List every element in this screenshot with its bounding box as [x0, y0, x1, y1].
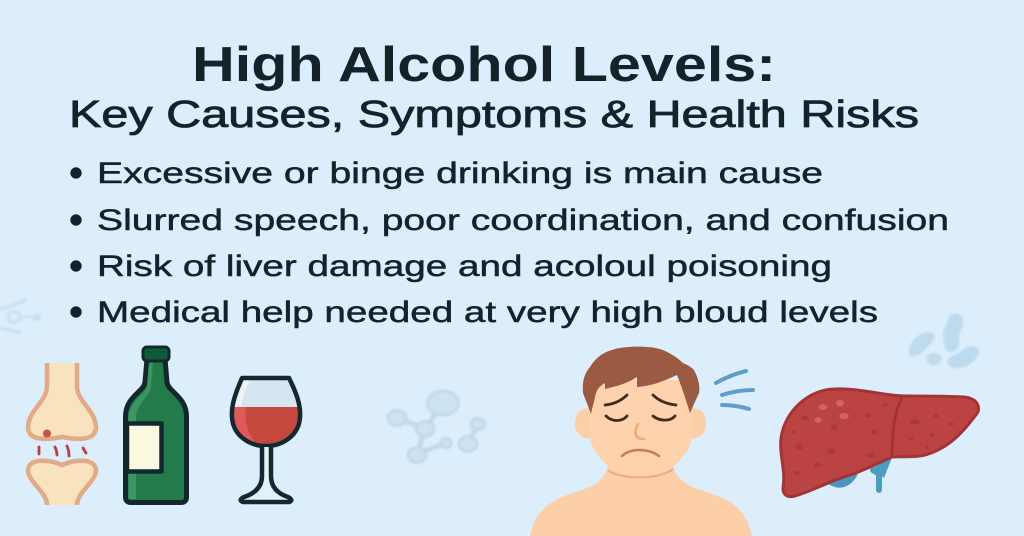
icon: faint cells right [909, 313, 979, 368]
spots [792, 403, 954, 476]
bullet 4: Medical help needed at very high bloud levels [97, 296, 878, 329]
highlights [814, 400, 849, 423]
bullet 3: Risk of liver damage and acoloul poisoning [97, 250, 832, 283]
mouth [622, 450, 659, 456]
hair [583, 347, 699, 414]
neck line [608, 469, 673, 477]
liver body [781, 389, 978, 497]
bile ducts [824, 474, 858, 488]
face [590, 380, 692, 477]
icon: wine glass [232, 378, 300, 502]
icon: liver [781, 389, 978, 497]
title: High Alcohol Levels: [192, 38, 776, 92]
lower bone [28, 461, 96, 505]
subtitle: Key Causes, Symptoms & Health Risks [69, 94, 919, 136]
bullet 2: Slurred speech, poor coordination, and confusion [97, 204, 949, 237]
bullet list [70, 157, 949, 329]
lobe divide [892, 398, 902, 456]
upper bone [28, 363, 96, 439]
icon: faint molecule center [388, 391, 485, 462]
bottle label [127, 424, 162, 472]
icon: dizziness lines [716, 371, 753, 409]
icon: wine bottle [126, 347, 186, 502]
eyebrows [605, 395, 676, 405]
ears [575, 408, 593, 438]
nose [636, 424, 644, 439]
body [530, 466, 752, 536]
icon: faint molecule left [0, 299, 40, 332]
icon: tired person [530, 347, 752, 536]
icon: joint bones [28, 363, 96, 505]
bullet 1: Excessive or binge drinking is main cause [97, 157, 823, 190]
closed eyes [606, 416, 675, 420]
joint marks [39, 446, 86, 456]
